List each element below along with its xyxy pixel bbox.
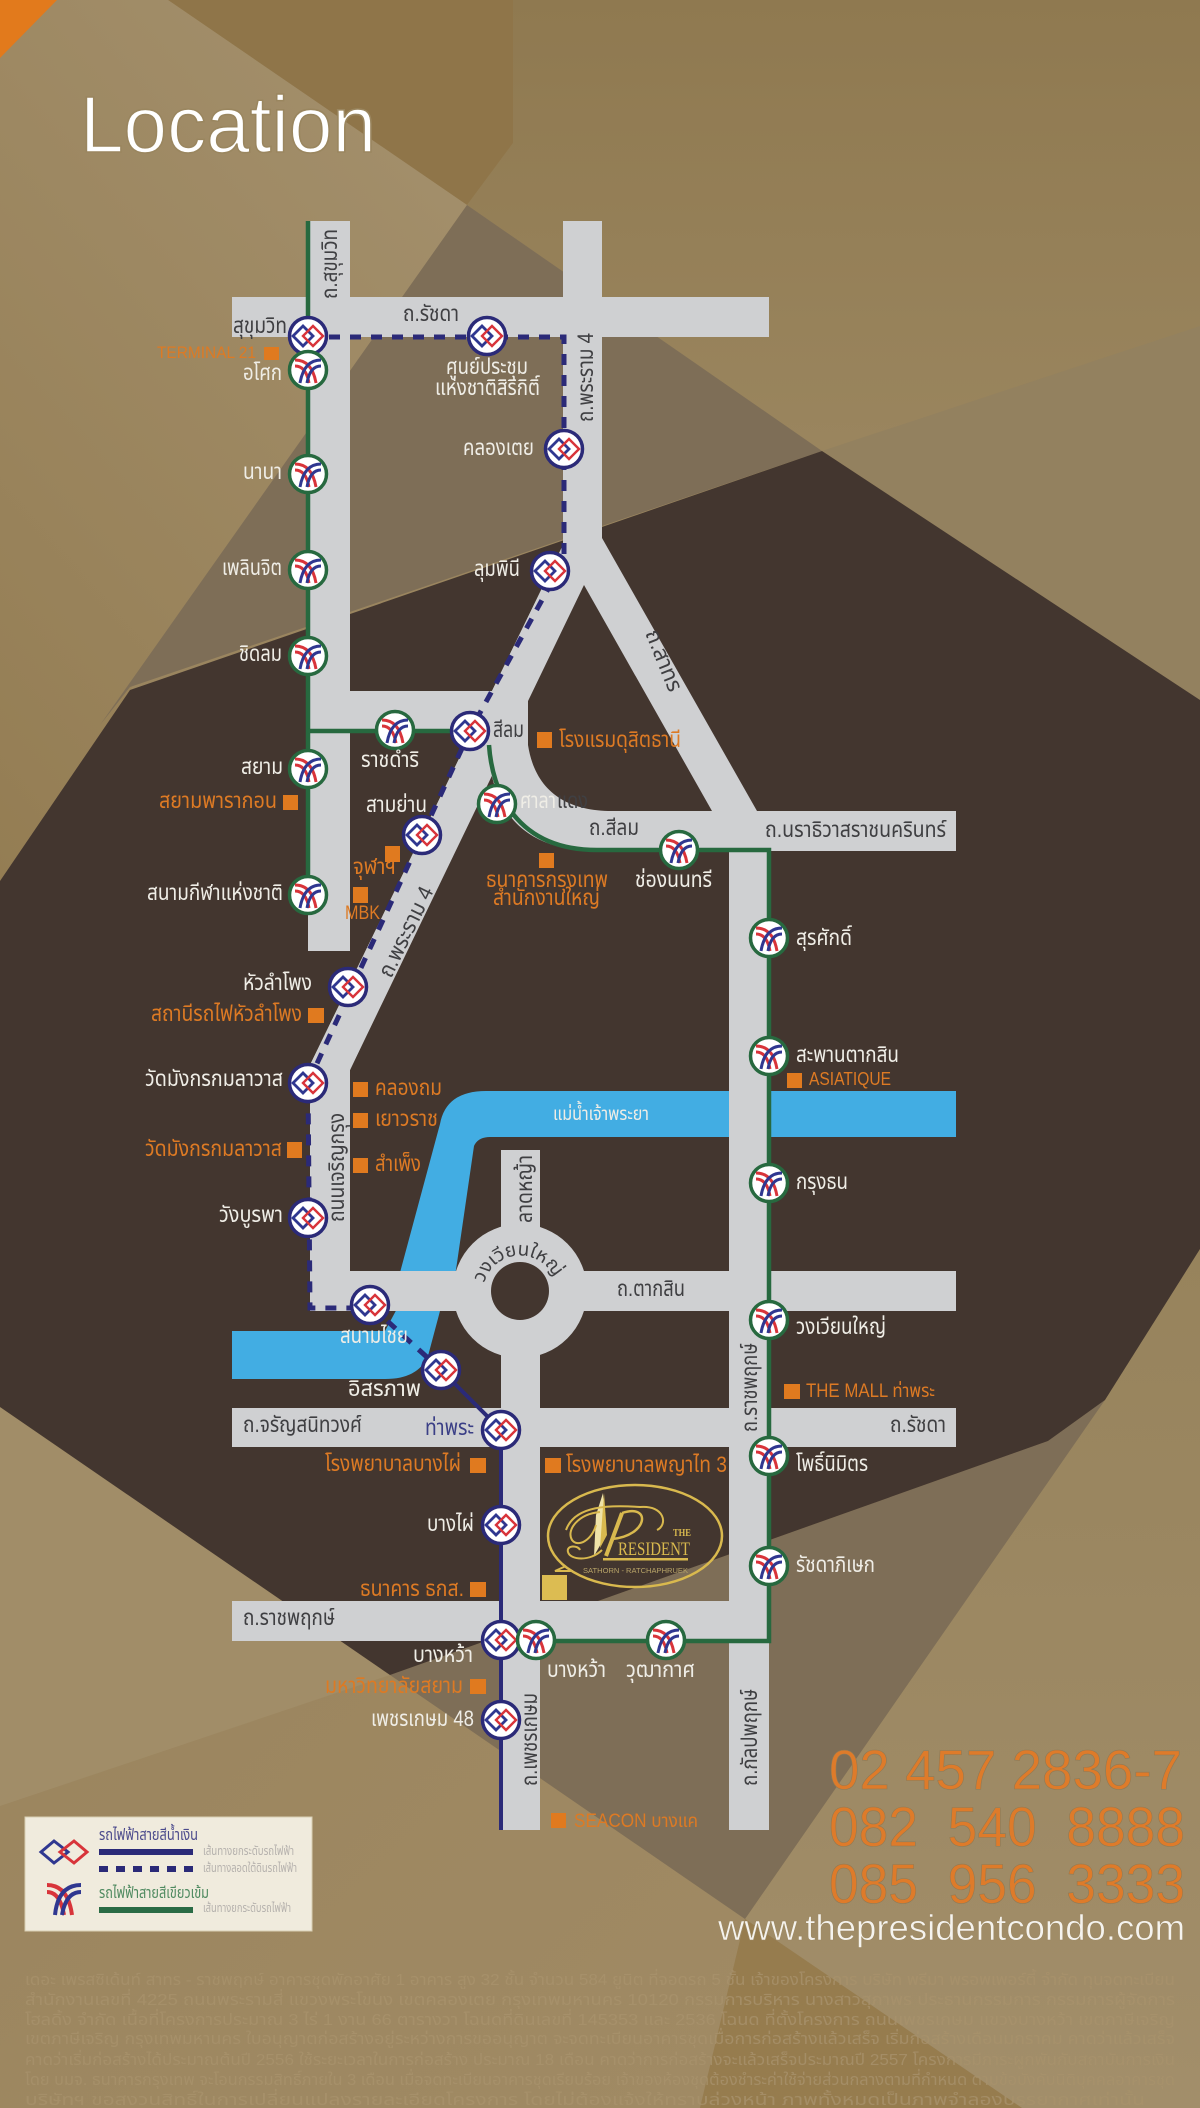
landmark: Hua Lamphong railway station: สถานีรถไฟหัวลำโพง [151,1001,302,1026]
road names: ถ.พระราม 4 [373,882,438,981]
road names [243,229,947,1786]
station: Siam: สยาม [241,754,283,779]
station: Wat Mangkon [145,1064,326,1102]
station: Sam Yan: สามย่าน [366,792,427,817]
station: Sirikit Centre: ศูนย์ประชุม [446,354,528,380]
station: Bang Wa MRT: บางหว้า [413,1642,473,1667]
landmark: Yaowarat [353,1106,438,1131]
station: Pho Nimit: โพธิ์นิมิตร [796,1450,868,1476]
road names: วงเวียนใหญ่ [474,1242,566,1282]
station: Chong Nonsi [635,832,712,892]
station: Itsaraphap: อิสรภาพ [348,1376,421,1401]
station: Khlong Toei [463,430,582,468]
legend caption: elevated: เส้นทางยกระดับรถไฟฟ้า [203,1844,294,1858]
road names: ถ.รัชดา [403,301,459,326]
station: Tha Phra: ท่าพระ [425,1415,474,1440]
landmark: Bangkok Bank HQ: ธนาคารกรุงเทพ [486,867,608,893]
contact phone numbers: 082 540 8888 [829,1795,1185,1858]
landmark: Phyathai 3 Hospital: โรงพยาบาลพญาไท 3 [566,1452,727,1477]
station: Krung Thon [750,1164,848,1202]
station: Bang Wa BTS: บางหว้า [547,1657,606,1682]
station: Chit Lom [239,638,326,674]
landmark: Asiatique: ASIATIQUE [809,1069,891,1089]
legend caption: underground: เส้นทางลอดใต้ดินรถไฟฟ้า [203,1861,297,1875]
contact phone numbers [829,1738,1185,1915]
station: Saphan Taksin: สะพานตากสิน [796,1042,899,1067]
legal fine print: โดย บมจ. ธนาคารกรุงเทพ จะโอนกรรมสิทธิ์ภายใน 3 เดือน เมื่อจดทะเบียนอาคารชุดเรียบร้อย เจ้าของห้องชุดต้องชำระค่าใช้จ่ายส่วนกลางตามที่กำหนด ตามข้อบังคับนิติบุคคลอาคารชุด [25,2068,1175,2089]
station: Sala Daeng: แดง [557,788,588,813]
station: Ratchada Phisek [750,1548,875,1584]
station: Sirikit Centre: แห่งชาติสิริกิติ์ [435,374,540,400]
road names: ถ.สาทร [640,626,688,695]
legal fine print: เขตภาษีเจริญ กรุงเทพมหานคร ใบอนุญาตก่อสร้างอยู่ระหว่างการขออนุญาต จะจดทะเบียนอาคารชุดเมื่อการก่อสร้างแล้วเสร็จ เริ่มก่อสร้างเดือนมกราคม คาดว่าแล้วเสร็จ [25,2027,1175,2048]
landmark: Sampeng: สำเพ็ง [375,1151,421,1176]
landmark: The Mall Tha Phra: THE MALL ท่าพระ [806,1379,935,1402]
station: Khlong Toei: คลองเตย [463,435,534,460]
station: Wutthakat: วุฒากาศ [626,1657,695,1683]
station: Hua Lamphong [243,968,366,1006]
landmarks [145,343,935,1832]
legend text: green line: รถไฟฟ้าสายสีเขียวเข้ม [99,1884,209,1902]
legend line: elevated [99,1849,193,1855]
station: Wat Mangkon: วัดมังกรกมลาวาส [145,1066,283,1091]
station: Sala Daeng [478,786,588,822]
station: Pho Nimit [750,1438,868,1476]
legal fine print: สำนักงานเลขที่ 4225 ถนนพระรามสี่ แขวงพระโขนง เขตคลองเตย กรุงเทพมหานคร 10120 กรรมการบริหาร นางสาวสุภาพร ประธานกรรมการ กรรมการผู้จัดการ [25,1988,1175,2009]
road names: ถนนเจริญกรุง [324,1113,350,1222]
website: www.thepresidentcondo.com [717,1907,1185,1948]
legal fine print: คาดว่าเริ่มก่อสร้างได้ประมาณต้นปี 2556 ใช้ระยะเวลาในการก่อสร้าง ประมาณ 18 เดือน คาดว่าการก่อสร้างจะแล้วเสร็จประมาณปี 2557 โครงการมีภาระผูกพันกับสถาบันการเงิน [25,2049,1175,2069]
station: Phetkasem 48 [371,1702,520,1738]
station: Tha Phra [425,1412,520,1448]
logo: The President Sathorn-Ratchaphruek [542,1485,722,1600]
legal fine print: เดอะ เพรสซิเด้นท์ สาทร - ราชพฤกษ์ อาคารชุดพักอาศัย 1 อาคาร สูง 32 ชั้น จำนวน 584 ยูนิต ที่จอดรถ 5 ชั้น เจ้าของโครงการ บริษัท พรีมา พรอพเพอร์ตี้ จำกัด ทุนจดทะเบียน [25,1968,1175,1989]
station: Sam Yan [366,792,440,854]
station: Wongwian Yai [750,1302,886,1339]
transit line: dark green BTS [308,221,769,1641]
station: Bang Phai [427,1506,520,1544]
landmark: BAAC bank: ธนาคาร ธกส. [360,1576,464,1601]
legend icon: BTS [47,1885,81,1915]
road names: ถ.นราธิวาสราชนครินทร์ [765,817,947,842]
title: Location [80,80,376,169]
road names: ถ.เพชรเกษม [517,1693,542,1786]
station: Bang Wa BTS [518,1622,606,1682]
station: Siam [241,750,326,788]
road names: ถ.ราชพฤกษ์ [243,1605,335,1630]
station: Asok: อโศก [243,360,282,385]
logo: The President Sathorn-Ratchaphruek: THE [673,1528,691,1539]
legend caption: green: เส้นทางยกระดับรถไฟฟ้า [203,1901,291,1915]
station: Lumphini [474,552,568,590]
station: Wang Burapha [219,1200,326,1236]
contact phone numbers: 085 956 3333 [829,1852,1185,1915]
landmark: Siam University: มหาวิทยาลัยสยาม [325,1673,463,1698]
station: Wutthakat [626,1622,695,1683]
landmark: Sampeng [353,1151,421,1176]
station: Lumphini: ลุมพินี [474,556,520,582]
station: Nana: นานา [243,459,282,484]
station: Bang Phai: บางไผ่ [427,1511,474,1536]
landmark: Wat Mangkon Kamalawat: วัดมังกรกมลาวาส [145,1136,282,1161]
landmark: Dusit Thani: โรงแรมดุสิตธานี [559,727,681,753]
landmark: MBK: MBK [345,903,380,924]
BTS stations [147,352,899,1683]
station: Wongwian Yai: วงเวียนใหญ่ [796,1314,886,1339]
contact phone numbers: 02 457 2836-7 [829,1738,1182,1801]
landmark: Bangkok Bank HQ [486,853,608,910]
station: Chit Lom: ชิดลม [239,641,282,666]
landmark: Terminal 21: TERMINAL 21 [157,343,256,362]
MRT stations [145,313,582,1738]
station: Krung Thon: กรุงธน [796,1169,848,1195]
station: Sukhumvit: สุขุมวิท [233,313,287,339]
road names: ถ.สุขุมวิท [317,229,343,299]
station: Wang Burapha: วังบูรพา [219,1202,283,1228]
station: Saphan Taksin [750,1038,899,1074]
station: Nana [243,456,326,492]
road names: ถ.กัลปพฤกษ์ [737,1689,762,1786]
legend [25,1817,312,1931]
road names: ถ.จรัญสนิทวงศ์ [243,1412,362,1437]
landmark: Yaowarat: เยาวราช [375,1106,438,1131]
road names: ถ.สีลม [589,815,639,840]
station: Bang Wa MRT [413,1622,520,1667]
station: National Stadium [147,876,326,914]
orange corner triangle [0,0,57,58]
river: Chao Phraya [232,1091,956,1379]
legal fine print: โฮลดิ้ง จำกัด เนื้อที่โครงการประมาณ 3 ไร่ 1 งาน 66 ตารางวา โฉนดที่ดินเลขที่ 145353 และ 2536 โฉนด ที่ตั้งโครงการ ถนนเพชรเกษม แขวงบางหว้า เขตภาษีเจริญ [25,2008,1175,2029]
landmark: Chulalongkorn: จุฬาฯ [353,854,396,880]
landmark: Bang Phai Hospital: โรงพยาบาลบางไผ่ [325,1451,461,1476]
station: Phetkasem 48: เพชรเกษม 48 [371,1706,474,1731]
station: Sirikit Centre [435,318,540,400]
road names: ถ.พระราม 4 [573,333,598,422]
road network [232,221,956,1830]
legend text: blue line: รถไฟฟ้าสายสีน้ำเงิน [99,1823,198,1844]
legal fine print [25,1968,1175,2108]
station: Surasak [750,920,852,956]
station: Chong Nonsi: ช่องนนทรี [635,867,712,892]
station: Asok [243,352,326,388]
road names: ถ.รัชดา [890,1412,946,1437]
river label: แม่น้ำเจ้าพระยา [553,1100,649,1125]
station: Ratchadamri: ราชดำริ [361,747,419,772]
road names: ถ.ตากสิน [617,1276,685,1301]
landmark: Khlong Thom [353,1075,442,1100]
landmark: Siam Paragon: สยามพารากอน [159,788,277,813]
station: Silom [452,712,524,750]
legend line: underground [99,1866,193,1872]
station: Sala Daeng: ศาลา [520,788,556,813]
station: Hua Lamphong: หัวลำโพง [243,970,312,995]
station: Phloen Chit [222,552,326,588]
station: Phloen Chit: เพลินจิต [222,555,282,580]
station: Itsaraphap [348,1352,460,1401]
station: Sanam Chai [340,1286,408,1348]
logo: The President Sathorn-Ratchaphruek: RESIDENT [618,1539,690,1560]
road names: ลาดหญ้า [512,1155,537,1223]
landmark: Seacon Bang Khae: SEACON บางแค [574,1811,698,1832]
landmark: MBK [345,887,380,924]
logo: The President Sathorn-Ratchaphruek: SATHORN - RATCHAPHRUEK [583,1566,688,1575]
station: Sanam Chai: สนามไชย [340,1323,408,1348]
legend line: green [99,1907,193,1913]
transit line: dark blue MRT elevated and underground [308,337,564,1830]
road names: ถ.ราชพฤกษ์ [737,1343,762,1432]
station: Surasak: สุรศักดิ์ [796,924,852,951]
station: Silom: สีลม [493,717,524,742]
station: Ratchada Phisek: รัชดาภิเษก [796,1552,875,1577]
station: Sukhumvit [233,313,326,354]
landmark: Bangkok Bank HQ: สำนักงานใหญ่ [493,885,600,910]
station: Ratchadamri [361,712,419,772]
station: National Stadium: สนามกีฬาแห่งชาติ [147,880,283,905]
legend icon: MRT [41,1841,87,1863]
landmark: Khlong Thom: คลองถม [375,1075,442,1100]
